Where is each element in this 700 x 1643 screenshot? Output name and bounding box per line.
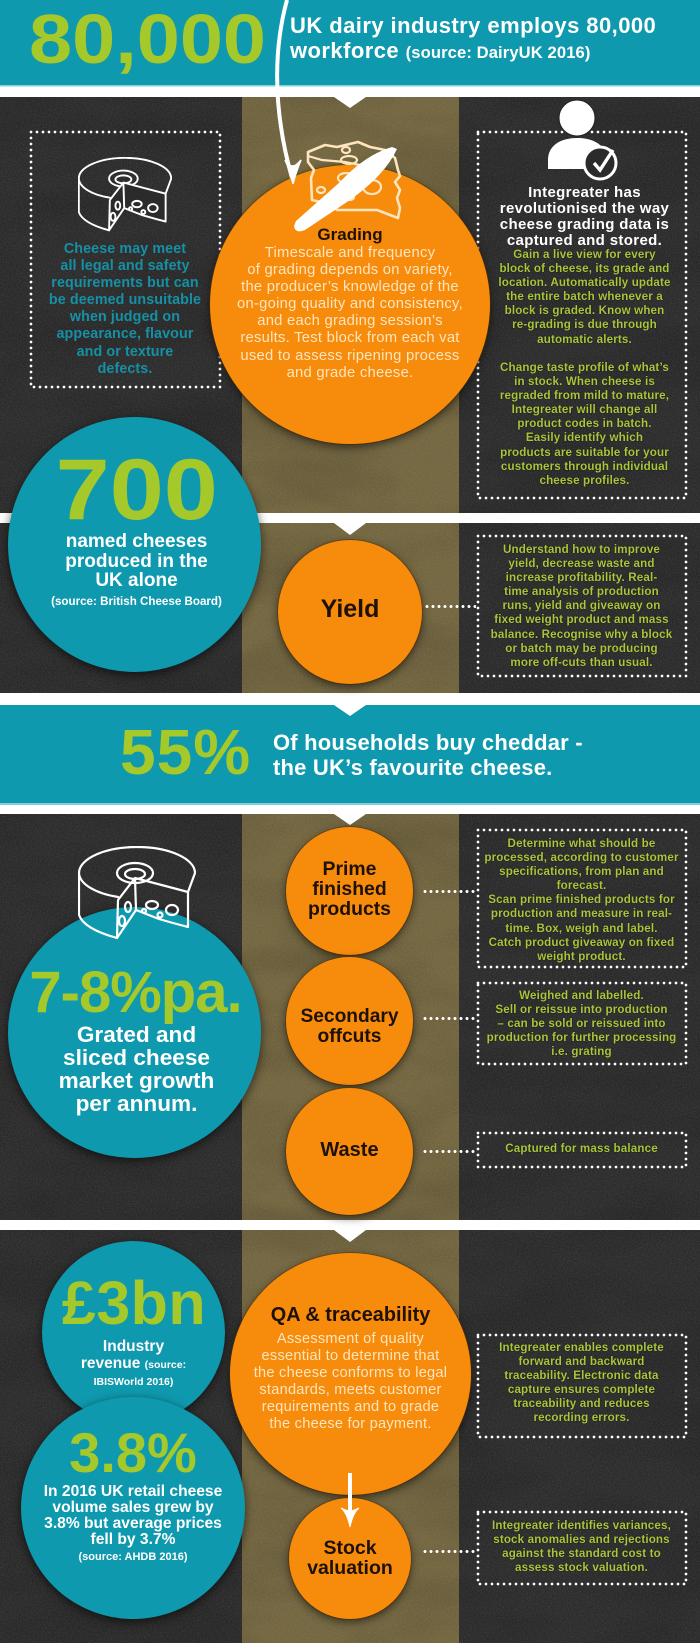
text: QA description: requirements and to grade (262, 1399, 439, 1415)
text: cheese suitability: Cheese may meet (64, 241, 186, 257)
text: QA description: Assessment of quality (277, 1331, 424, 1347)
text: live view benefits: re-grading is due through (512, 318, 657, 331)
text: taste profile benefits: products are suitable for your (500, 446, 669, 459)
text: grading description: results. Test block from each vat (240, 330, 460, 346)
text: QA description: the cheese conforms to legal (254, 1365, 447, 1381)
label: secondary offcuts: Secondary (300, 1006, 399, 1027)
text: cheese suitability: and or texture (77, 344, 173, 360)
text: secondary note (487, 989, 676, 1058)
connector: secondary to note (422, 1017, 476, 1020)
text: yield note: or batch may be producing (505, 642, 658, 655)
text: industry revenue: Industry (103, 1338, 164, 1355)
text: taste profile benefits: Easily identify which (526, 431, 643, 444)
text: secondary note: i.e. grating (551, 1045, 612, 1058)
text: industry revenue (81, 1338, 186, 1388)
text: traceability note: Integreater enables complete (499, 1341, 664, 1354)
label: secondary offcuts: offcuts (318, 1026, 381, 1046)
connector: yield to note (424, 605, 476, 608)
circle: secondary offcuts (286, 957, 413, 1085)
text: cheese suitability: requirements but can (51, 275, 199, 291)
text: yield note: Understand how to improve (503, 543, 660, 556)
text: prime note: weight product. (537, 950, 626, 963)
label: yield: Yield (321, 595, 379, 623)
panel: cheese suitability note (29, 130, 221, 388)
text: named cheeses (65, 531, 208, 591)
text: traceability note: traceability and reduces (513, 1397, 650, 1410)
text: live view benefits: location. Automatically update (498, 276, 671, 289)
text: stock note: stock anomalies and rejections (493, 1533, 670, 1546)
panel: stock note (476, 1510, 687, 1585)
text: yield note: balance. Recognise why a block (491, 628, 672, 641)
connector: prime to note (422, 890, 476, 893)
text: taste profile benefits: product codes in batch. (517, 417, 652, 430)
text: grading description: and each grading session’s (257, 313, 443, 329)
text: QA description: the cheese for payment. (269, 1416, 432, 1432)
text: QA description: standards, meets customer (259, 1382, 442, 1398)
text: live view benefits: block of cheese, its grade and (499, 262, 670, 275)
label: prime finished products: products (308, 898, 391, 920)
text: yield note: runs, yield and giveaway on (502, 599, 661, 612)
text: QA description: essential to determine that (262, 1348, 439, 1364)
text: retail volume: 3.8% but average prices (44, 1515, 222, 1532)
circle: stock valuation (289, 1498, 411, 1619)
text: yield note: more off-cuts than usual. (510, 656, 653, 669)
circle: yield (278, 540, 422, 684)
text: live view benefits: Gain a live view for every (513, 248, 656, 261)
text: cheese suitability: be deemed unsuitable (49, 292, 201, 308)
text: grading description: of grading depends on variety, (247, 262, 453, 278)
label: prime finished products: Prime (323, 858, 376, 880)
text: secondary note: Sell or reissue into production (495, 1003, 668, 1016)
text: yield note (491, 543, 672, 669)
text: live view benefits: the entire batch whenever a (506, 290, 663, 303)
text: retail volume: fell by 3.7% (91, 1531, 175, 1548)
text: grading description: the producer’s knowledge of the (241, 279, 459, 295)
text: traceability note: capture ensures complete (508, 1383, 655, 1396)
stat: 700: 700 (56, 442, 218, 538)
text: retail volume (44, 1483, 222, 1548)
text: cheese suitability (49, 241, 201, 377)
icon: cheese wheel with wedge (78, 157, 172, 232)
text: named cheeses: produced in the (65, 551, 208, 572)
heading: QA and traceability: QA & traceability (271, 1304, 430, 1326)
text: taste profile benefits: cheese profiles. (539, 474, 630, 487)
connector: waste to note (422, 1150, 476, 1153)
text: grading description (237, 245, 463, 381)
top band: workforce statement (290, 13, 656, 62)
panel: Integreater grading benefits (476, 130, 687, 499)
text: households buy cheddar: the UK’s favourite cheese. (273, 755, 552, 780)
text: grated and sliced growth: per annum. (76, 1091, 197, 1116)
arrow: QA to stock valuation (340, 1473, 360, 1528)
panel: yield note (476, 534, 687, 677)
text: grated and sliced growth: market growth (59, 1068, 214, 1093)
text: cheese suitability: when judged on (70, 309, 180, 325)
text: traceability note: recording errors. (534, 1411, 629, 1424)
icon: person with check badge (548, 100, 618, 180)
circle: QA and traceability (230, 1253, 471, 1495)
text: traceability note (499, 1341, 664, 1424)
text: industry revenue: revenue (source: (81, 1355, 186, 1372)
text: taste profile benefits: Integreater will change all (512, 403, 657, 416)
text: grated and sliced growth: Grated and (77, 1022, 196, 1047)
text: households buy cheddar: Of households buy cheddar - (273, 730, 583, 755)
text: traceability note: traceability. Electronic data (504, 1369, 659, 1382)
text: cheese suitability: appearance, flavour (56, 326, 193, 342)
stat: 55%: 55% (120, 716, 251, 788)
text: taste profile benefits: regraded from mild to mature, (500, 389, 669, 402)
text: grading description: and grade cheese. (287, 365, 413, 381)
text: prime note: time. Box, weigh and label. (505, 922, 658, 935)
text: prime note: specifications, from plan and (499, 865, 664, 878)
text: Integreater headline: revolutionised the way (500, 200, 669, 217)
panel: secondary note (476, 981, 687, 1065)
text: named cheeses: named cheeses (66, 531, 207, 552)
text: yield note: increase profitability. Real- (506, 571, 657, 584)
top band: 80,000 figure: 80,000 (29, 0, 266, 78)
label: prime finished products: finished (312, 878, 387, 900)
text: stock note: against the standard cost to (502, 1547, 661, 1560)
text: stock note: Integreater identifies variances, (492, 1519, 671, 1532)
text: taste profile benefits: customers through individual (501, 460, 668, 473)
text: taste profile benefits: Change taste profile of what’s (500, 361, 669, 374)
text: QA description (254, 1331, 447, 1432)
text: Integreater headline: cheese grading data is (500, 216, 669, 233)
panel: waste note (476, 1131, 687, 1168)
text: yield note: time analysis of production (504, 585, 659, 598)
text: waste note: Captured for mass balance (505, 1142, 658, 1155)
text: grading description: Timescale and frequency (265, 245, 435, 261)
label: waste: Waste (320, 1139, 379, 1161)
icon: cheese wheel on growth circle (78, 846, 196, 940)
text: taste profile benefits: in stock. When cheese is (514, 375, 655, 388)
text: taste profile benefits (500, 361, 669, 487)
text: households buy cheddar (273, 730, 583, 780)
text: live view benefits: block is graded. Know when (505, 304, 664, 317)
text: named cheeses: UK alone (95, 570, 178, 591)
text: source: (source: British Cheese Board) (51, 595, 222, 608)
text: secondary note: – can be sold or reissued into (497, 1017, 666, 1030)
text: grated and sliced growth (59, 1022, 214, 1116)
connector: stock to note (422, 1550, 476, 1553)
label: prime finished products (308, 858, 391, 920)
label: secondary offcuts (300, 1006, 399, 1046)
text: yield note: yield, decrease waste and (508, 557, 655, 570)
circle: waste (286, 1088, 413, 1215)
text: live view benefits: automatic alerts. (537, 333, 632, 346)
text: industry revenue: IBISWorld 2016) (94, 1376, 173, 1388)
text: grading description: on-going quality and consistency, (237, 296, 463, 312)
panel: traceability note (476, 1333, 687, 1438)
top band: workforce statement: workforce (source: DairyUK 2016) (290, 38, 590, 62)
circle: prime finished products (286, 827, 413, 955)
text: Integreater headline: captured and stored. (507, 232, 662, 249)
top band: workforce statement: UK dairy industry employs 80,000 (290, 13, 656, 38)
text: stock note (492, 1519, 671, 1574)
heading: grading: Grading (317, 225, 383, 244)
circle: 700 named cheeses (8, 417, 261, 672)
label: stock valuation: valuation (307, 1557, 393, 1579)
text: retail volume: In 2016 UK retail cheese (44, 1483, 222, 1500)
text: Integreater headline (500, 184, 669, 249)
text: stock note: assess stock valuation. (515, 1561, 648, 1574)
text: grated and sliced growth: sliced cheese (63, 1045, 210, 1070)
stat: 3.8%: 3.8% (69, 1421, 197, 1484)
text: prime note: production and measure in real- (491, 907, 672, 920)
text: secondary note: Weighed and labelled. (519, 989, 644, 1002)
text: secondary note: production for further processing (487, 1031, 676, 1044)
circle: market growth (8, 907, 261, 1158)
text: live view benefits (498, 248, 671, 346)
text: prime note: Catch product giveaway on fixed (489, 936, 674, 949)
circle: 3.8% retail volume (21, 1397, 245, 1619)
text: cheese suitability: defects. (98, 361, 152, 377)
text: traceability note: forward and backward (518, 1355, 645, 1368)
text: retail volume: volume sales grew by (52, 1499, 214, 1516)
label: stock valuation: Stock (323, 1537, 377, 1559)
text: yield note: fixed weight product and mass (494, 613, 669, 626)
text: prime note: Determine what should be (508, 837, 655, 850)
label: stock valuation (307, 1537, 393, 1579)
text: prime note: Scan prime finished products for (488, 893, 675, 906)
text: prime note: forecast. (557, 879, 606, 892)
arrow: curved arrow from top band to grading (275, 0, 302, 184)
text: prime note: processed, according to customer (484, 851, 679, 864)
stat: 7-8%pa.: 7-8%pa. (29, 960, 242, 1025)
text: source: (source: AHDB 2016) (78, 1551, 188, 1563)
text: prime note (484, 837, 679, 963)
panel: prime note (476, 828, 687, 968)
text: cheese suitability: all legal and safety (60, 258, 190, 274)
stat: £3bn: £3bn (62, 1269, 206, 1337)
circle: £3bn revenue (42, 1241, 225, 1424)
text: Integreater headline: Integreater has (528, 184, 641, 201)
icon: cheese wedge and knife (294, 140, 402, 232)
circle: grading (210, 165, 490, 444)
text: grading description: used to assess ripening process (240, 348, 460, 364)
